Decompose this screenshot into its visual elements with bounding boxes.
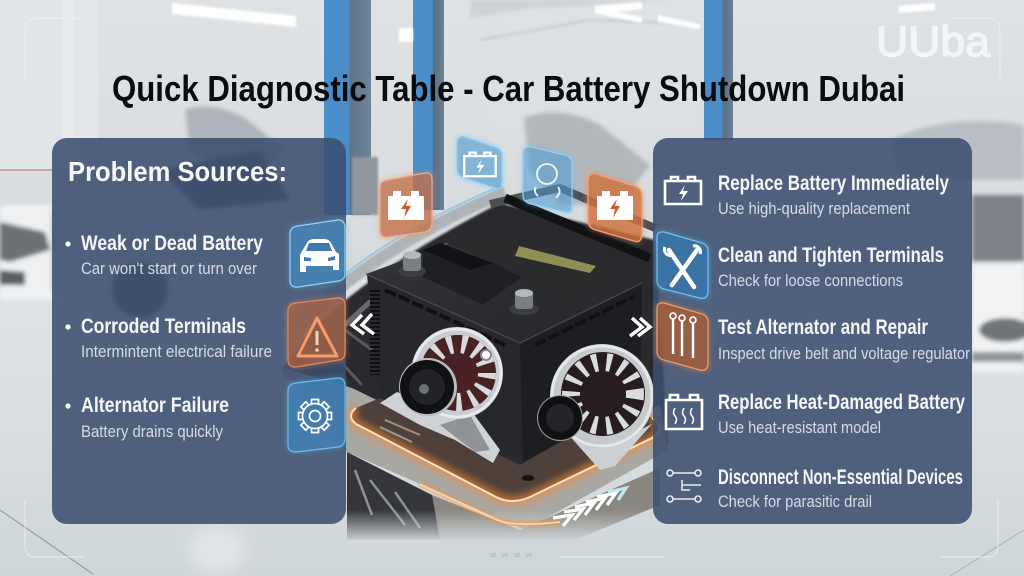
- metal plate: [280, 367, 668, 530]
- bottom indicator dots: [490, 553, 532, 557]
- orange glowing platform: [351, 398, 660, 524]
- solution: replace battery immediately: Replace Battery Immediately: [718, 172, 949, 195]
- right chevrons: [630, 318, 650, 336]
- item: alternator failure: Alternator Failure: [81, 394, 229, 417]
- solution: clean and tighten terminals: [657, 232, 944, 298]
- battery: [366, 226, 642, 462]
- title: Quick Diagnostic Table - Car Battery Shutdown Dubai: [112, 68, 905, 109]
- icon: warning tile: [288, 298, 345, 367]
- icon: car tile: [290, 220, 345, 287]
- solution: disconnect non-essential devices: [667, 466, 963, 511]
- solution: disconnect non-essential devices: Check for parasitic drail: [718, 492, 872, 511]
- alternator right: [537, 344, 654, 470]
- item: corroded terminals: [65, 315, 272, 361]
- logo: UUba: [876, 18, 990, 66]
- item: corroded terminals: Intermintent electrical failure: [81, 342, 272, 361]
- battery left face: [367, 275, 523, 462]
- item: corroded terminals: Corroded Terminals: [81, 315, 246, 338]
- battery right face: [520, 283, 642, 462]
- engine bay: [280, 186, 668, 542]
- left chevrons: [352, 314, 374, 334]
- battery lid: [440, 226, 618, 307]
- solution: replace battery immediately: Use high-quality replacement: [718, 199, 910, 218]
- solution: replace heat-damaged battery: Replace Heat-Damaged Battery: [718, 391, 965, 414]
- alternator left: [380, 327, 503, 463]
- solution: test alternator and repair: Inspect drive belt and voltage regulator: [718, 344, 970, 363]
- solution: test alternator and repair: Test Alternator and Repair: [718, 316, 928, 339]
- icon: blue battery tile: [457, 137, 502, 188]
- panel: solutions: [653, 138, 972, 524]
- solution: replace battery immediately: [665, 172, 949, 218]
- terminal right: [509, 289, 539, 315]
- item: weak or dead battery: Car won't start or turn over: [81, 259, 257, 278]
- solution: replace heat-damaged battery: Use heat-resistant model: [718, 418, 881, 437]
- icon: orange battery tile: [380, 173, 432, 237]
- panel: problem sources: [52, 138, 346, 524]
- battery top: [366, 232, 642, 343]
- item: weak or dead battery: [65, 232, 263, 278]
- icon: gear tile: [288, 378, 345, 452]
- item: alternator failure: Battery drains quickly: [81, 422, 223, 441]
- solution: replace heat-damaged battery: [666, 391, 965, 437]
- terminal left: [398, 251, 426, 277]
- icon: orange battery tile right: [588, 174, 642, 242]
- solution: test alternator and repair: [657, 303, 970, 370]
- icon: circle diagnostic tile: [523, 147, 572, 212]
- solution: clean and tighten terminals: Clean and Tighten Terminals: [718, 244, 944, 267]
- bottom chevrons: [553, 488, 626, 526]
- heading: problem sources: Problem Sources:: [68, 156, 287, 187]
- solution: clean and tighten terminals: Check for loose connections: [718, 271, 903, 290]
- item: alternator failure: [65, 394, 229, 441]
- item: weak or dead battery: Weak or Dead Battery: [81, 232, 263, 255]
